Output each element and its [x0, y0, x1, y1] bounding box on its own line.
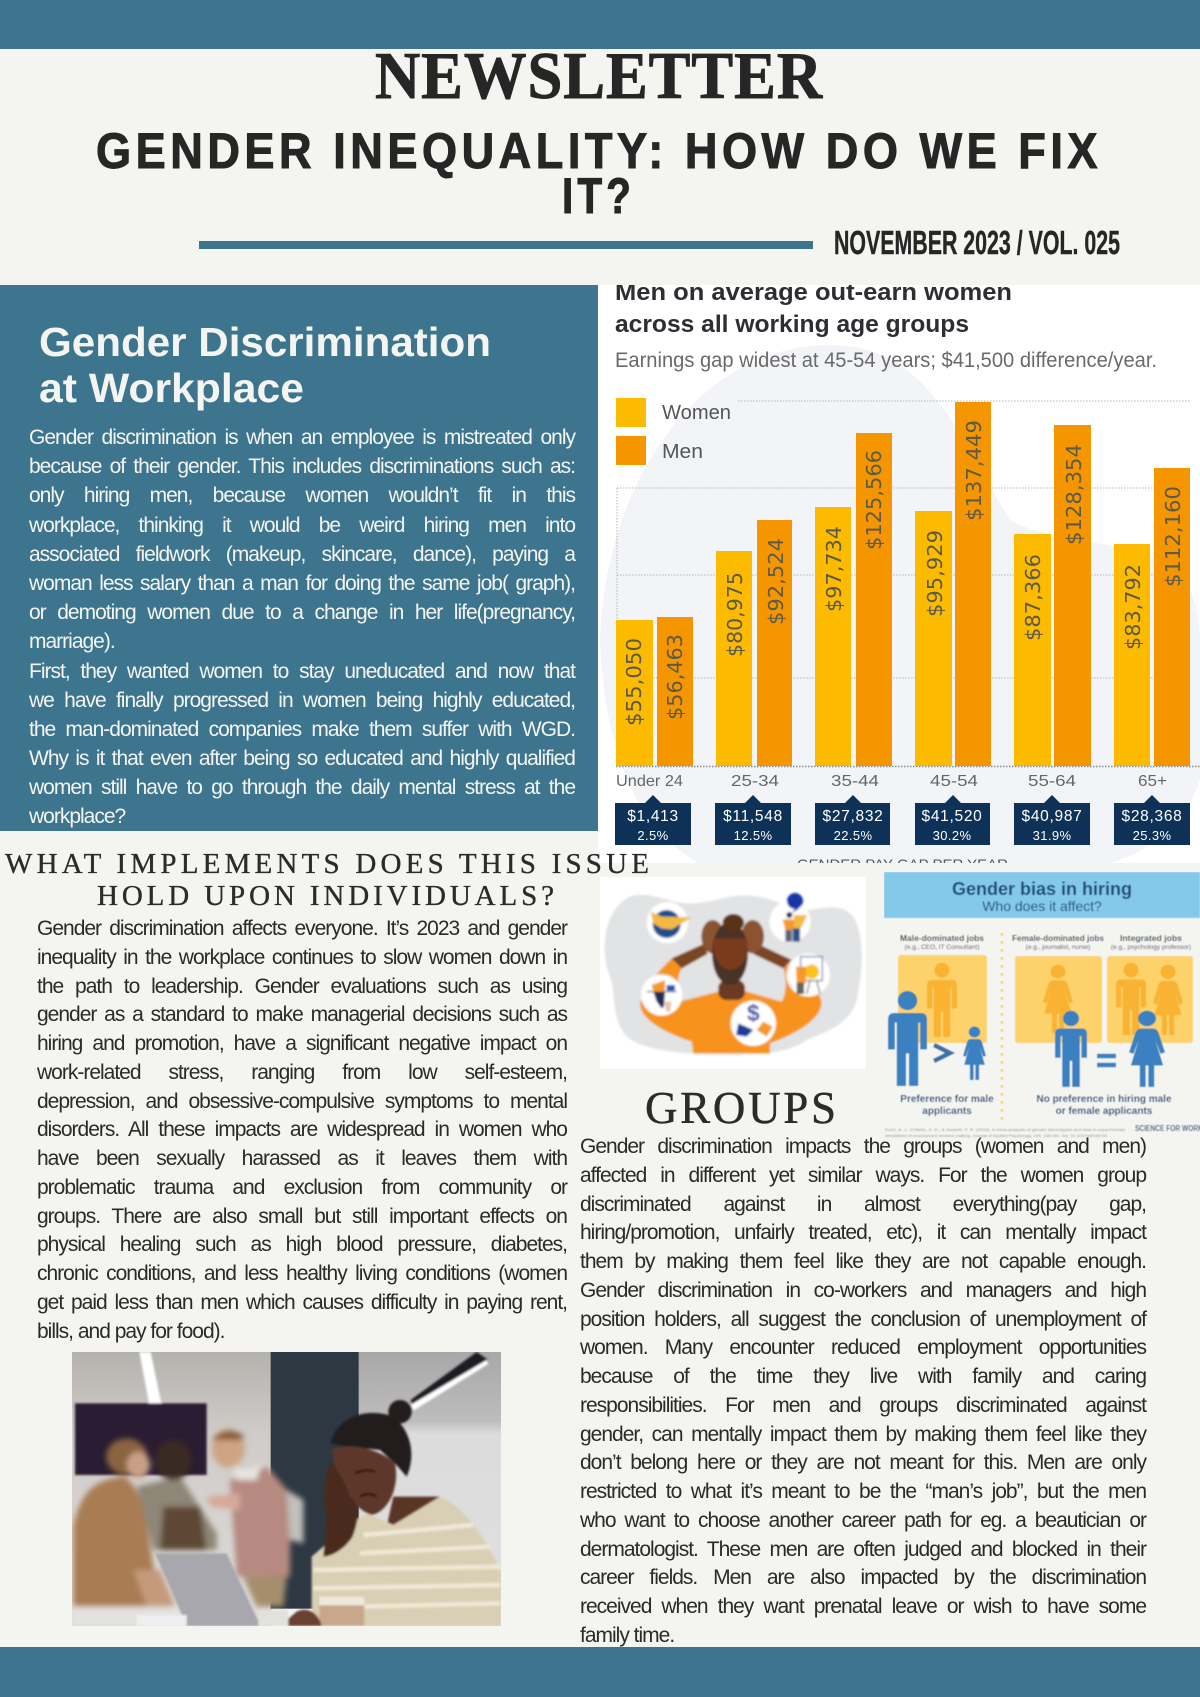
photo: stressed woman at office — [72, 1352, 501, 1626]
body text: groups — [580, 1135, 1147, 1647]
chart: earnings by age group — [598, 285, 1200, 863]
body text: groups: because of the time they live with family and caring — [580, 1365, 1146, 1388]
bar value labels: $87,366 — [1021, 554, 1045, 641]
subtitle line one: GENDER INEQUALITY: HOW DO WE FIX — [96, 123, 1102, 179]
column labels: Integrated jobs — [1120, 933, 1182, 943]
pay gap callout values — [627, 808, 1182, 843]
icon: couple and home — [783, 893, 807, 942]
panel heading — [39, 319, 491, 411]
panel: gender discrimination at workplace — [0, 285, 598, 831]
body text: what implements: groups. There are also small but still important effects on — [37, 1204, 567, 1228]
body text: groups: Gender discrimination impacts the groups (women and men) — [580, 1135, 1146, 1158]
pay gap callout values: 22.5% — [834, 828, 872, 843]
heading: what implements — [4, 848, 649, 912]
body text: what implements: depression, and obsessive-compulsive symptoms to mental — [37, 1090, 567, 1112]
bottom band — [0, 1647, 1200, 1697]
captions: Preference for male — [900, 1094, 994, 1105]
body text: groups: received when they want prenatal leave or wish to have some — [580, 1595, 1146, 1618]
panel body text: First, they wanted women to stay uneducated and now that — [29, 660, 575, 682]
divider — [1001, 933, 1003, 1120]
panel body text: or demoting women due to a change in her life(pregnancy, — [29, 601, 575, 624]
heading: what implements: WHAT IMPLEMENTS DOES THIS ISSUE — [5, 848, 649, 880]
body text: what implements: Gender discrimination affects everyone. It’s 2023 and gender — [37, 917, 567, 940]
bar value labels: $55,050 — [622, 638, 646, 726]
body text: groups: don’t belong here or they are not meant for this. Men are only — [580, 1451, 1146, 1474]
source note — [885, 1127, 1125, 1138]
body text: groups: restricted to what it’s meant to be the “man’s job”, but the men — [580, 1480, 1146, 1503]
pay gap callout values: $27,832 — [823, 808, 883, 825]
body text: groups: dermatologist. These men are often judged and blocked in their — [580, 1538, 1146, 1560]
bar value labels — [622, 420, 1185, 726]
age group labels: 25-34 — [731, 773, 779, 790]
pay gap callout values: 12.5% — [734, 828, 772, 843]
infographic: gender bias in hiring — [884, 872, 1200, 1138]
panel heading: at Workplace — [39, 365, 304, 411]
icon: dollar handshake: $ — [747, 1000, 760, 1026]
body text: what implements: physical healing such as high blood pressure, diabetes, — [37, 1233, 567, 1256]
icon: presentation board — [796, 957, 822, 994]
body text: what implements: have been sexually harassed as it leaves them with — [37, 1147, 567, 1170]
panel body text: because of their gender. This includes discriminations such as: — [29, 455, 575, 478]
icon: dollar handshake — [736, 1000, 773, 1037]
captions: or female applicants — [1056, 1106, 1153, 1117]
body text: groups: family time. — [580, 1624, 674, 1647]
panel body text: only hiring men, because women wouldn’t fit in this — [29, 484, 575, 507]
equals symbol — [1097, 1056, 1116, 1065]
body text: what implements: get paid less than men which causes difficulty in paying rent, — [37, 1291, 567, 1314]
panel body text: Why is it that even after being so educated and highly qualified — [29, 747, 575, 770]
illustration: stressed man thinking of worries — [600, 877, 866, 1069]
source note: simulations of employment decision making. Journal of Applied Psychology, 100, 128-161. doi: 10.1037/a0036734 — [885, 1133, 1108, 1138]
age group labels: 65+ — [1138, 773, 1167, 790]
body text: what implements: the path to leadership. Gender evaluations such as using — [37, 974, 567, 998]
column labels: (e.g., journalist, nurse) — [1026, 944, 1090, 951]
body text: what implements: disorders. All these impacts are widespread in women who — [37, 1118, 567, 1141]
heading: what implements: HOLD UPON INDIVIDUALS? — [97, 880, 554, 912]
body text: groups: hiring/promotion, unfairly treated, etc), it can mentally impact — [580, 1221, 1146, 1244]
body text: what implements: work-related stress, ranging from low self-esteem, — [37, 1061, 567, 1084]
bars: women — [616, 507, 1150, 766]
pay gap callout values: 25.3% — [1133, 828, 1171, 843]
greater than symbol — [934, 1045, 950, 1061]
bar value labels: $128,354 — [1062, 444, 1086, 545]
panel body text: marriage). — [29, 630, 115, 653]
pay gap callout values: $11,548 — [723, 808, 783, 825]
top band — [0, 0, 1200, 49]
thought blob background — [605, 895, 862, 1054]
subtitle line two: IT? — [562, 168, 635, 224]
body text: what implements: gender as a standard to make managerial decisions such as — [37, 1003, 567, 1026]
body text: groups: Gender discrimination in co-workers and managers and high — [580, 1279, 1146, 1302]
banner: Who does it affect? — [982, 898, 1102, 914]
incumbents (orange figures) — [927, 963, 1183, 1037]
panel body text: Gender discrimination is when an employee is mistreated only — [29, 426, 575, 449]
bar value labels: $95,929 — [923, 530, 947, 617]
captions: applicants — [922, 1106, 972, 1117]
captions: No preference in hiring male — [1036, 1094, 1172, 1105]
banner: Gender bias in hiring — [952, 879, 1132, 899]
body text: groups: affected in different yet similar ways. For the women group — [580, 1164, 1146, 1187]
age group labels: 45-54 — [930, 773, 978, 790]
bar value labels: $97,734 — [822, 526, 846, 612]
pay gap callout values: $1,413 — [627, 808, 679, 825]
body text: groups: who want to choose another career path for eg. a beautician or — [580, 1509, 1146, 1532]
legend: Men — [662, 441, 703, 463]
worry bubbles — [641, 901, 830, 1046]
pay gap callout values: 31.9% — [1033, 828, 1071, 843]
column labels: Male-dominated jobs — [900, 933, 984, 943]
source note: Koch, A. J., D'Mello, S. D., & Sackett, P. R. (2015). A meta-analysis of gender stereotypes and bias in experimental — [885, 1127, 1125, 1132]
captions — [900, 1094, 1172, 1117]
legend: Women — [662, 402, 731, 424]
body text: what implements: bills, and pay for food). — [37, 1320, 224, 1342]
age group labels: 35-44 — [831, 773, 879, 790]
icon: globe and plane — [651, 910, 692, 938]
panel body text: workplace? — [29, 805, 125, 828]
bars: men — [657, 402, 1190, 766]
body text: groups: discriminated against in almost everything(pay gap, — [580, 1192, 1146, 1216]
icon: desk worker — [647, 980, 677, 1012]
chart title: across all working age groups — [615, 311, 969, 338]
body text: what implements: inequality in the workplace continues to slow women down in — [37, 946, 567, 969]
body text: groups: position holders, all suggest the conclusion of unemployment of — [580, 1308, 1146, 1330]
arms and hands — [672, 920, 792, 968]
panel body text: associated fieldwork (makeup, skincare, dance), paying a — [29, 543, 575, 566]
legend — [616, 398, 731, 465]
pay gap callout values: $28,368 — [1122, 808, 1182, 825]
bar value labels: $112,160 — [1161, 486, 1185, 587]
yellow job panels — [898, 955, 1193, 1043]
body text: groups: them by making them feel like they are not capable enough. — [580, 1250, 1146, 1273]
body text: groups: women. Many encounter reduced employment opportunities — [580, 1336, 1146, 1359]
body text: groups: career fields. Men are also impacted by the discrimination — [580, 1566, 1146, 1589]
torso — [640, 958, 822, 1053]
banner — [884, 872, 1200, 918]
body text: what implements — [37, 917, 568, 1342]
bar value labels: $125,566 — [862, 450, 886, 550]
chart subtitle: Earnings gap widest at 45-54 years; $41,500 difference/year. — [615, 349, 1157, 372]
column labels: Female-dominated jobs — [1012, 933, 1104, 943]
pay gap callouts — [615, 795, 1190, 845]
body text: what implements: hiring and promotion, have a significant negative impact on — [37, 1032, 567, 1055]
column labels — [900, 933, 1191, 951]
pay gap callout values: 2.5% — [637, 828, 669, 843]
age group labels — [616, 773, 1167, 790]
body text: groups: responsibilities. For men and groups discriminated against — [580, 1394, 1146, 1417]
bar value labels: $137,449 — [962, 420, 986, 521]
column labels: (e.g., psychology professor) — [1111, 944, 1191, 951]
panel body text: workplace, thinking it would be weird hiring men into — [29, 514, 575, 537]
panel body text — [29, 426, 576, 828]
pay gap callout values: 30.2% — [933, 828, 971, 843]
bar value labels: $92,524 — [764, 538, 788, 625]
panel body text: we have finally progressed in women being highly educated, — [29, 689, 575, 712]
body text: what implements: problematic trauma and exclusion from community or — [37, 1176, 567, 1199]
panel body text: women still have to go through the daily mental stress at the — [29, 776, 575, 799]
age group labels: Under 24 — [616, 773, 683, 790]
body text: groups: gender, can mentally impact them by making them feel like they — [580, 1422, 1146, 1446]
column labels: (e.g., CEO, IT Consultant) — [904, 944, 980, 951]
bar value labels: $83,792 — [1121, 564, 1145, 650]
chart title — [615, 279, 1012, 338]
body text: what implements: chronic conditions, and less healthy living conditions (women — [37, 1262, 567, 1285]
age group labels: 55-64 — [1028, 773, 1076, 790]
pay gap callout values: $41,520 — [922, 808, 982, 825]
header rule — [199, 241, 813, 249]
pay gap callout values: $40,987 — [1022, 808, 1082, 825]
masthead — [96, 49, 1120, 261]
panel heading: Gender Discrimination — [39, 319, 491, 365]
head — [712, 914, 748, 1000]
panel body text: woman less salary than a man for doing the same job( graph), — [29, 572, 575, 595]
bar value labels: $56,463 — [663, 634, 687, 720]
applicants (blue figures) — [888, 991, 1165, 1087]
panel body text: the man-dominated companies make them suffer with WGD. — [29, 718, 575, 741]
bar value labels: $80,975 — [723, 572, 747, 657]
